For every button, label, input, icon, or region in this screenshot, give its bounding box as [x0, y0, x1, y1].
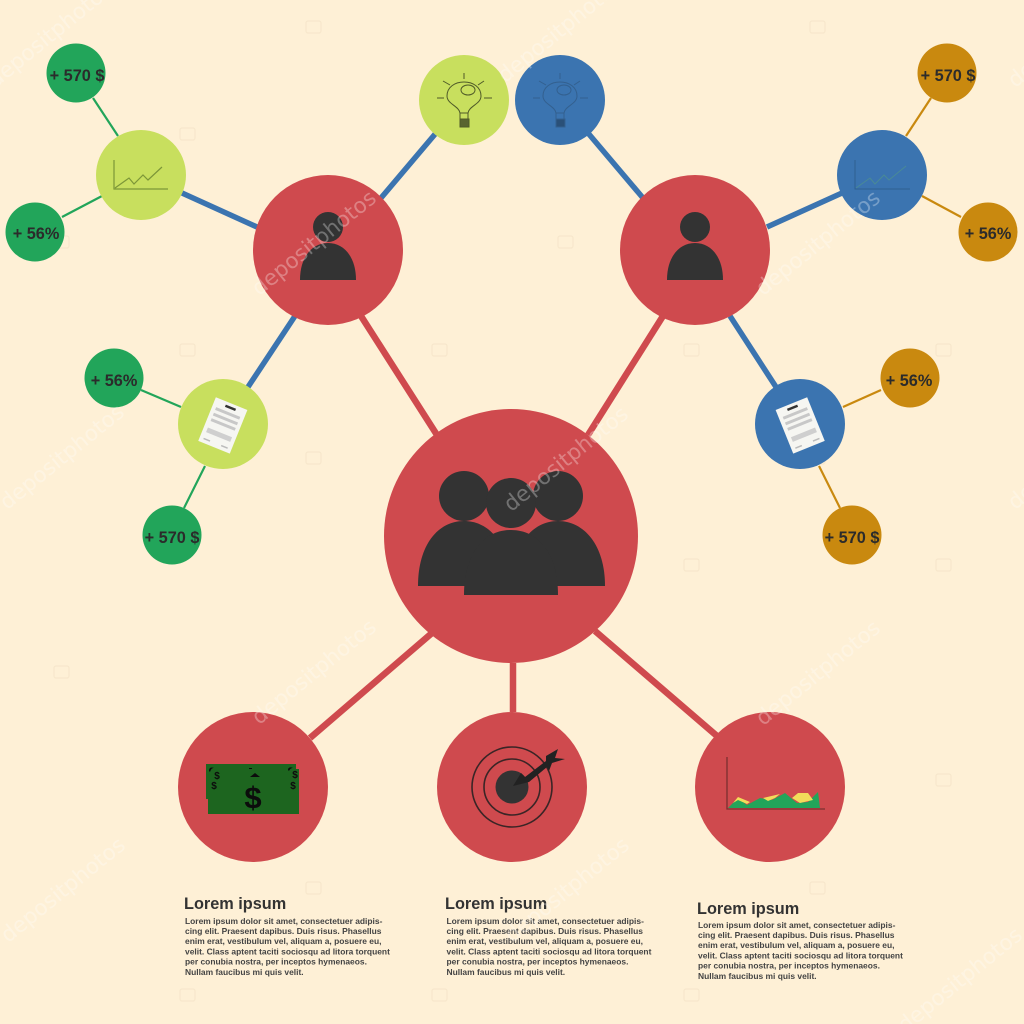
text block: center	[445, 895, 652, 977]
watermarks: depositphotos	[500, 833, 634, 948]
badge: amber 570 lower: + 570 $	[825, 529, 879, 547]
node: lime chart	[96, 130, 186, 220]
left person node	[253, 175, 403, 325]
node: lime idea	[419, 55, 509, 145]
connectors: red main links	[310, 316, 717, 738]
watermarks: depositphotos	[0, 833, 130, 948]
connectors: amber links	[819, 98, 961, 508]
icon: light bulb	[533, 73, 588, 127]
connectors: blue links	[182, 133, 842, 387]
connectors: green links	[62, 98, 205, 508]
text block: right	[697, 900, 903, 981]
icon: person	[300, 212, 356, 280]
text block: left	[184, 895, 390, 977]
node: target	[437, 712, 587, 862]
badge: green 56 left: + 56%	[13, 225, 60, 243]
text block: center: Lorem ipsum	[445, 895, 547, 913]
text block: left: Lorem ipsum	[184, 895, 286, 913]
text block: left: Nullam faucibus mi quis velit.	[185, 967, 304, 977]
badge: amber 56 right	[958, 202, 1018, 262]
watermarks: depositphotos	[751, 616, 885, 731]
node: blue idea	[515, 55, 605, 145]
icon: area chart	[727, 757, 825, 809]
badge: green 56 lower: + 56%	[91, 372, 138, 390]
icon: banknotes: $	[211, 781, 217, 792]
badge: green 570 lower: + 570 $	[145, 529, 199, 547]
icon: document	[776, 397, 825, 454]
text block: left: per conubia nostra, per inceptos hymenaeos.	[185, 956, 367, 966]
icon: light bulb	[437, 73, 492, 127]
text block: center: velit. Class aptent taciti sociosqu ad litora torquent	[446, 946, 652, 956]
node: money	[178, 712, 328, 862]
icon: banknotes	[206, 764, 299, 815]
text block: center: Lorem ipsum dolor sit amet, consectetuer adipis-	[446, 916, 644, 926]
badge: green 570 lower	[142, 506, 202, 564]
badge: amber 56 lower: + 56%	[886, 372, 933, 390]
watermarks: depositphotos	[247, 186, 381, 301]
text block: right: cing elit. Praesent dapibus. Duis risus. Phasellus	[698, 930, 895, 940]
text block: center: enim erat, vestibulum vel, aliquam a, posuere eu,	[446, 936, 643, 946]
watermarks: depositphotos	[247, 615, 381, 730]
icon: line chart	[855, 160, 910, 189]
icon: banknotes: $	[214, 771, 220, 782]
node: blue chart	[837, 130, 927, 220]
text block: right: Lorem ipsum	[697, 900, 799, 918]
text block: center: Nullam faucibus mi quis velit.	[446, 967, 565, 977]
text block: center: per conubia nostra, per inceptos hymenaeos.	[446, 956, 628, 966]
icon: person	[667, 212, 723, 280]
node: lime document	[178, 379, 268, 469]
badge: amber 570 top: + 570 $	[921, 67, 975, 85]
icon: group of people	[418, 471, 605, 595]
badge: amber 570 lower	[822, 506, 882, 564]
badge: amber 56 right: + 56%	[965, 225, 1012, 243]
text block: right: Lorem ipsum dolor sit amet, consectetuer adipis-	[698, 920, 896, 930]
badge: green 570 top	[46, 44, 106, 102]
icon: banknotes: $	[290, 781, 296, 792]
badge: green 56 lower	[84, 348, 144, 408]
watermarks: depositphotos	[499, 402, 633, 517]
text block: left: enim erat, vestibulum vel, aliquam a, posuere eu,	[185, 936, 381, 946]
icon: banknotes: $	[244, 780, 262, 815]
watermarks: depositphotos	[751, 186, 885, 301]
right person node	[620, 175, 770, 325]
icon: banknotes: $	[292, 770, 298, 781]
badge: green 56 left	[6, 202, 64, 262]
icon: line chart	[114, 160, 168, 189]
icon: document	[198, 397, 247, 454]
node: area chart	[695, 712, 845, 862]
text block: center: cing elit. Praesent dapibus. Duis risus. Phasellus	[446, 926, 643, 936]
badge: green 570 top: + 570 $	[50, 67, 104, 85]
text block: right: per conubia nostra, per inceptos hymenaeos.	[698, 960, 880, 970]
text block: left: velit. Class aptent taciti sociosqu ad litora torquent	[185, 946, 390, 956]
central team node	[384, 409, 638, 663]
icon: target with arrow	[472, 747, 565, 827]
text block: right: enim erat, vestibulum vel, aliquam a, posuere eu,	[698, 940, 894, 950]
text block: left: cing elit. Praesent dapibus. Duis risus. Phasellus	[185, 926, 382, 936]
badge: amber 56 lower	[880, 348, 940, 408]
text block: right: Nullam faucibus mi quis velit.	[698, 971, 817, 981]
text block: right: velit. Class aptent taciti sociosqu ad litora torquent	[698, 950, 903, 960]
text block: left: Lorem ipsum dolor sit amet, consectetuer adipis-	[185, 916, 383, 926]
badge: amber 570 top	[918, 44, 976, 102]
node: blue document	[755, 379, 845, 469]
